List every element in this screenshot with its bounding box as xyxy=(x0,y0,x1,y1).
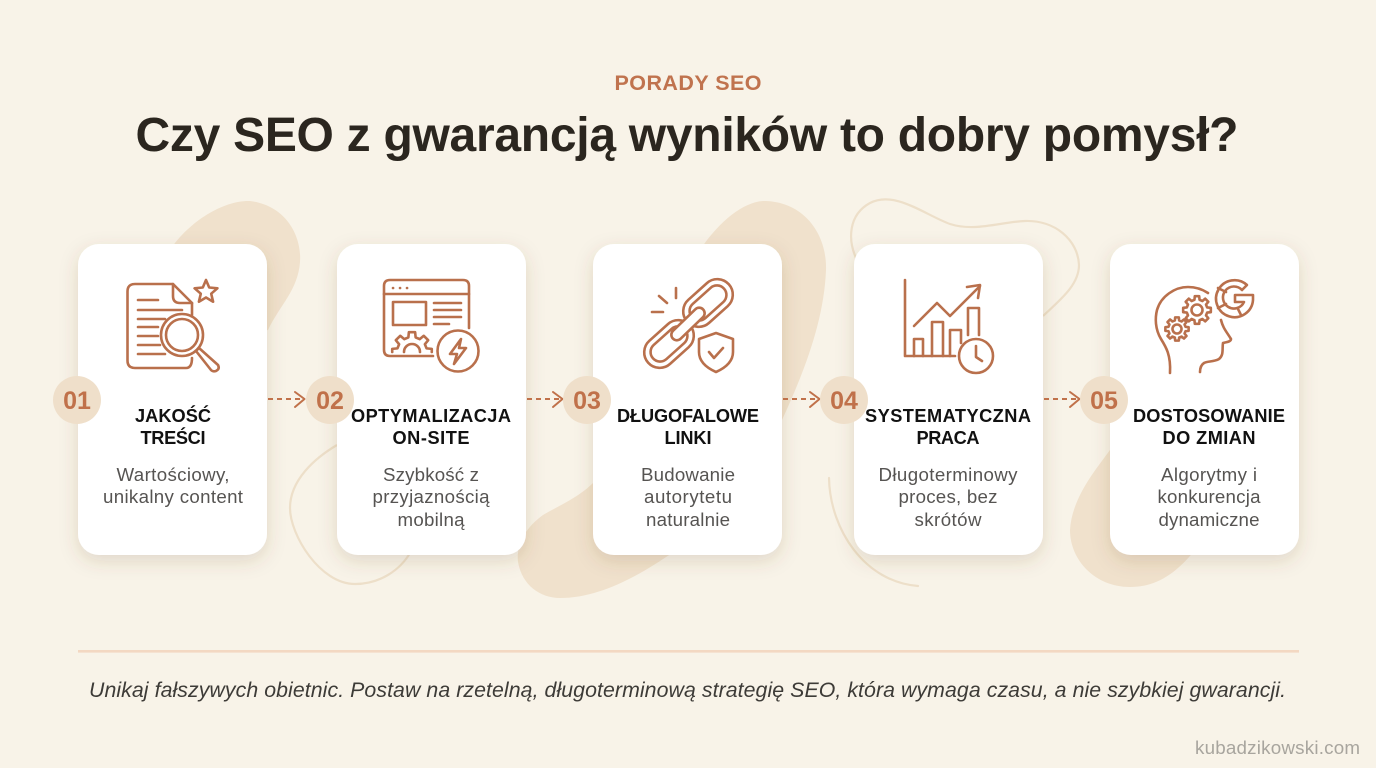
number badge 05: 05 xyxy=(1090,387,1118,415)
card heading xyxy=(135,405,211,448)
title: Czy SEO z gwarancją wyników to dobry pomysł? xyxy=(136,109,1238,162)
card text xyxy=(1158,464,1261,530)
card text: naturalnie xyxy=(646,509,730,530)
card text: przyjaznością xyxy=(372,486,490,507)
arrow 1 to 2 xyxy=(268,392,304,407)
panel: step 1 xyxy=(78,244,267,555)
watermark: kubadzikowski.com xyxy=(1195,737,1360,758)
panel: step 4 xyxy=(854,244,1043,555)
card heading: PRACA xyxy=(916,428,980,448)
number badge 05 xyxy=(1080,376,1128,424)
number badge 02: 02 xyxy=(316,387,344,415)
decorative background shapes xyxy=(170,199,1195,598)
card heading: SYSTEMATYCZNA xyxy=(865,406,1031,426)
card heading xyxy=(865,406,1031,448)
card text xyxy=(103,464,244,507)
card heading: ON-SITE xyxy=(392,428,470,448)
arrow 3 to 4 xyxy=(783,392,820,407)
card text: unikalny content xyxy=(103,486,244,507)
card text: proces, bez xyxy=(898,486,998,507)
number badge 01 xyxy=(53,376,101,424)
card text: Algorytmy i xyxy=(1161,464,1257,485)
icon: growth chart with clock xyxy=(905,280,993,373)
card heading xyxy=(351,406,511,448)
card heading: JAKOŚĆ xyxy=(135,405,211,426)
card heading xyxy=(1133,406,1285,448)
number badge 01: 01 xyxy=(63,387,91,415)
card heading: TREŚCI xyxy=(140,427,206,448)
number badge 02 xyxy=(306,376,354,424)
card text: Budowanie xyxy=(641,464,735,485)
number badge 03 xyxy=(563,376,611,424)
eyebrow: PORADY SEO xyxy=(614,71,762,95)
panel: step 5 xyxy=(1110,244,1299,555)
card heading: DO ZMIAN xyxy=(1162,428,1256,448)
arrow 4 to 5 xyxy=(1044,392,1080,407)
card heading xyxy=(617,406,759,448)
number badge 03: 03 xyxy=(573,387,601,415)
card text: mobilną xyxy=(398,509,465,530)
card text xyxy=(641,464,735,530)
card text: Szybkość z xyxy=(383,464,479,485)
card text: Długoterminowy xyxy=(878,464,1018,485)
number badge 04: 04 xyxy=(830,387,858,415)
card heading: DOSTOSOWANIE xyxy=(1133,406,1285,426)
card text: konkurencja xyxy=(1158,486,1261,507)
icon: chain link with shield xyxy=(638,273,739,374)
card text xyxy=(372,464,490,530)
card heading: OPTYMALIZACJA xyxy=(351,406,511,426)
card text: Wartościowy, xyxy=(116,464,230,485)
footer statement: Unikaj fałszywych obietnic. Postaw na rzetelną, długoterminową strategię SEO, która wymaga czasu, a nie szybkiej gwarancji. xyxy=(89,678,1286,702)
card heading: LINKI xyxy=(664,428,712,448)
panel: step 2 xyxy=(337,244,526,555)
card text: dynamiczne xyxy=(1158,509,1260,530)
icon: document with magnifier and star xyxy=(128,280,219,371)
card heading: DŁUGOFALOWE xyxy=(617,406,759,426)
number badge 04 xyxy=(820,376,868,424)
icon: head with gears and G xyxy=(1156,280,1253,373)
card text xyxy=(878,464,1018,530)
arrow 2 to 3 xyxy=(527,392,562,407)
icon: browser window with gear and bolt xyxy=(384,280,478,372)
panel: step 3 xyxy=(593,244,782,555)
card text: skrótów xyxy=(914,509,982,530)
card text: autorytetu xyxy=(644,486,732,507)
